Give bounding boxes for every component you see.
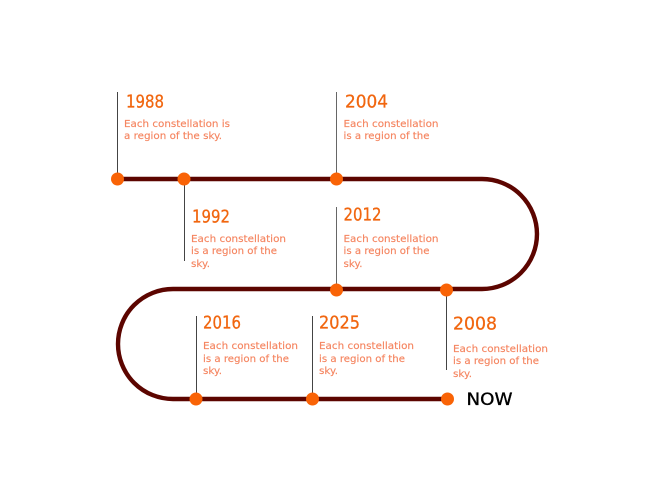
milestone 1992 — [178, 172, 286, 270]
milestone 2025: is a region of the — [319, 354, 405, 365]
milestone 1988: a region of the sky. — [124, 131, 222, 142]
milestone 2025 — [306, 314, 414, 406]
milestone 2012 — [330, 206, 438, 296]
milestone 2012: 2012 — [344, 206, 382, 226]
milestone 1988 — [111, 92, 230, 186]
milestone 2025: 2025 — [319, 314, 360, 334]
milestone 2004: Each constellation — [344, 119, 438, 130]
milestone 2012: sky. — [344, 259, 362, 270]
milestone 2004: 2004 — [345, 92, 388, 112]
milestone 1988: 1988 — [126, 92, 164, 112]
milestone 2016 — [190, 314, 298, 406]
milestone 1992: Each constellation — [191, 234, 286, 245]
milestone 2008: sky. — [453, 369, 472, 380]
end point: NOW — [441, 390, 512, 409]
milestone 2004: is a region of the — [344, 131, 430, 142]
milestone 2016: Each constellation — [203, 341, 298, 352]
milestone 2025: sky. — [319, 366, 338, 377]
milestone 2016: 2016 — [203, 314, 241, 334]
milestone 2025: Each constellation — [319, 341, 414, 352]
milestone 2012: Each constellation — [344, 234, 438, 245]
milestone 2008: 2008 — [453, 314, 497, 334]
milestone 2016: sky. — [203, 366, 222, 377]
serpentine timeline path — [117, 179, 537, 399]
milestone 1988: Each constellation is — [124, 119, 230, 130]
milestone 2008 — [440, 284, 548, 380]
milestone 1992: 1992 — [192, 208, 230, 228]
milestone 2004 — [330, 92, 438, 186]
milestone 2012: is a region of the — [344, 246, 430, 257]
milestone 1992: is a region of the — [191, 246, 277, 257]
milestone 2008: is a region of the — [453, 356, 539, 367]
milestone 2008: Each constellation — [453, 344, 548, 355]
milestone 1992: sky. — [191, 259, 210, 270]
end point: NOW: NOW — [466, 390, 512, 409]
milestone 2016: is a region of the — [203, 354, 289, 365]
